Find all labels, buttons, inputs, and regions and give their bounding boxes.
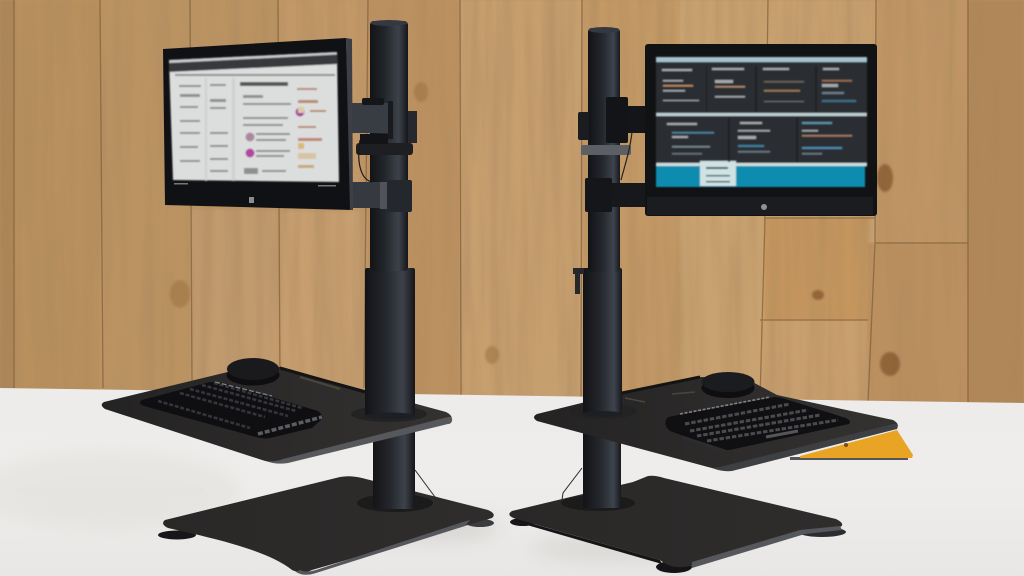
knob [226,358,280,386]
knob [702,372,754,398]
wood tone overlay [0,0,1024,405]
left stand [102,20,494,575]
wood wall background [0,0,1024,405]
logo [249,197,254,203]
base plate [158,476,494,575]
lower pole [357,425,433,512]
cable [562,468,582,500]
screen [169,52,339,182]
upper pole [588,27,620,272]
wood grain texture [0,0,1024,405]
cable [415,470,452,503]
column sleeve [351,268,427,422]
column sleeve [569,268,637,419]
plank seams and knots [14,0,968,402]
upper arm bracket [578,97,647,155]
right stand [509,27,898,573]
lower arm bracket [585,178,646,212]
upper pole [370,20,408,271]
orange folder [790,430,913,460]
lower pole [561,425,635,511]
screen [656,57,867,187]
keyboard tray [102,367,452,464]
left monitor [163,38,353,210]
base plate [509,476,846,573]
keyboard [140,382,322,438]
keyboard [665,397,850,451]
keyboard tray [534,377,898,471]
lower arm bracket [352,180,412,212]
height clamp [573,268,584,294]
right monitor [645,44,877,216]
white table surface [0,388,1024,576]
taskbar dots [174,183,188,184]
upper arm bracket [352,98,417,155]
